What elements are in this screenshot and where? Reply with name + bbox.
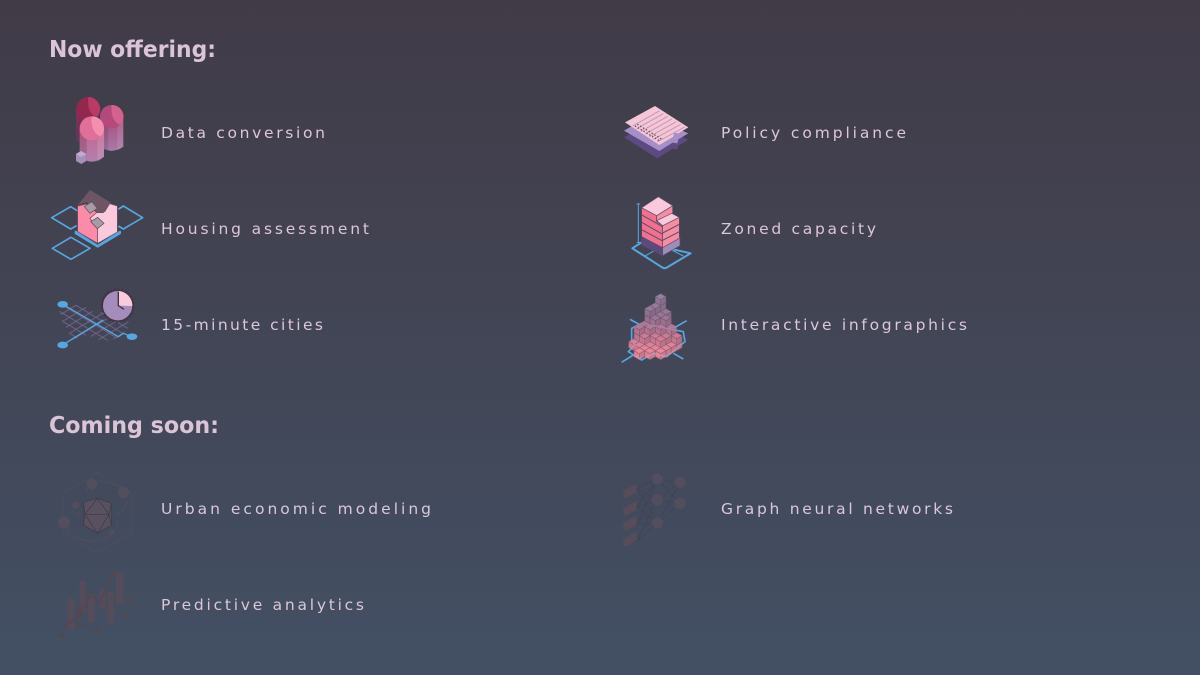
- label: policy compliance: Policy compliance: [721, 124, 906, 142]
- icon: data conversion cylinders: [76, 97, 123, 164]
- label: graph neural networks: Graph neural networks: [721, 500, 953, 518]
- heading: now offering: Now offering:: [49, 37, 216, 63]
- icon: urban economic modeling: [58, 473, 132, 552]
- label: predictive analytics: Predictive analytics: [161, 596, 364, 614]
- label: zoned capacity: Zoned capacity: [721, 220, 876, 238]
- icon: zoned capacity building: [632, 197, 691, 268]
- label: interactive infographics: Interactive infographics: [721, 316, 967, 334]
- icon: graph neural networks: [623, 473, 686, 547]
- icon: predictive analytics: [58, 570, 133, 637]
- label: housing assessment: Housing assessment: [161, 220, 369, 238]
- icon: interactive infographics voxels: [621, 294, 687, 363]
- icon: housing assessment: [52, 190, 143, 259]
- heading: coming soon: Coming soon:: [49, 413, 219, 439]
- icon: 15-minute cities: [57, 289, 137, 348]
- label: 15-minute cities: 15-minute cities: [161, 316, 323, 334]
- icon: policy compliance layers: [624, 106, 688, 158]
- label: urban economic modeling: Urban economic modeling: [161, 500, 431, 518]
- label: data conversion: Data conversion: [161, 124, 325, 142]
